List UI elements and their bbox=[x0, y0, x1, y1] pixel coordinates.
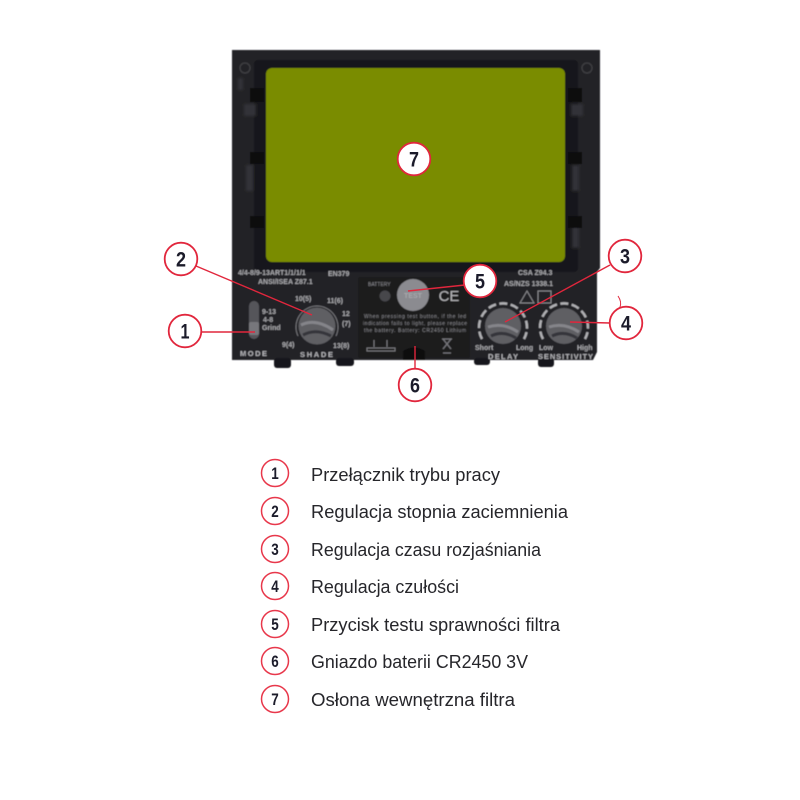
disposal symbol bbox=[442, 339, 452, 353]
callout 1: 1 bbox=[180, 320, 190, 344]
mode switch: 9-13 bbox=[262, 309, 276, 316]
right standards text bbox=[504, 270, 553, 288]
shade knob: 10(5) bbox=[295, 296, 311, 303]
CE mark: CE bbox=[439, 288, 459, 305]
mode switch: MODE bbox=[240, 349, 267, 358]
side rails bbox=[238, 78, 583, 248]
callout 3 bbox=[609, 240, 641, 272]
shade knob: SHADE bbox=[300, 350, 333, 359]
polarity symbol bbox=[367, 340, 395, 351]
callout 4: 4 bbox=[621, 312, 631, 336]
legend item 5: 5 bbox=[271, 615, 279, 634]
green filter window bbox=[266, 68, 565, 262]
left standards text: 4/4-8/9-13ART1/1/1/1 bbox=[238, 270, 306, 277]
legend item 3: Regulacja czasu rozjaśniania bbox=[311, 540, 542, 560]
legend bbox=[262, 460, 569, 712]
panel instruction text bbox=[363, 314, 467, 334]
legend item 7 bbox=[262, 686, 516, 712]
battery socket bbox=[403, 348, 425, 360]
legend item 7: Osłona wewnętrzna filtra bbox=[311, 690, 516, 710]
callout 2 bbox=[165, 243, 197, 275]
legend item 5 bbox=[262, 610, 561, 638]
battery test panel: TEST bbox=[404, 293, 423, 300]
legend item 6: Gniazdo baterii CR2450 3V bbox=[311, 652, 528, 672]
delay knob: DELAY bbox=[488, 352, 518, 361]
callout 6: 6 bbox=[410, 374, 420, 398]
battery test panel bbox=[358, 277, 470, 360]
legend item 4: Regulacja czułości bbox=[311, 577, 459, 597]
callout 2: 2 bbox=[176, 248, 186, 272]
callout 5 bbox=[464, 265, 496, 297]
warning icons bbox=[520, 291, 551, 303]
callout 7 bbox=[398, 143, 430, 175]
legend item 3 bbox=[262, 536, 542, 562]
screws bbox=[240, 63, 250, 73]
right standards text: CSA Z94.3 bbox=[518, 270, 552, 277]
callout 1 bbox=[169, 315, 201, 347]
inner frame bbox=[254, 60, 578, 272]
mode switch: 4-8 bbox=[263, 317, 273, 324]
test button bbox=[397, 279, 429, 311]
legend item 4 bbox=[262, 572, 459, 600]
right standards text: AS/NZS 1338.1 bbox=[504, 281, 553, 288]
shade knob: 11(6) bbox=[327, 298, 343, 305]
left standards text: ANSI/ISEA Z87.1 bbox=[258, 279, 313, 286]
callout 5: 5 bbox=[475, 270, 485, 294]
delay knob: Long bbox=[516, 345, 533, 352]
battery test panel: BATTERY bbox=[368, 282, 391, 288]
sensitivity knob: High bbox=[577, 345, 593, 352]
left standards text: EN379 bbox=[328, 271, 350, 278]
sensitivity knob bbox=[538, 303, 593, 361]
device body bbox=[232, 50, 600, 360]
shade knob: (7) bbox=[342, 321, 351, 328]
panel instruction text: the battery. Battery: CR2450 Lithium bbox=[364, 328, 466, 334]
panel instruction text: When pressing test button, if the led bbox=[364, 314, 466, 320]
legend item 6 bbox=[262, 648, 528, 674]
shade knob bbox=[282, 296, 351, 359]
legend item 2: 2 bbox=[271, 502, 279, 521]
shade knob: 12 bbox=[342, 311, 350, 318]
callout 6 bbox=[399, 369, 431, 401]
legend item 5: Przycisk testu sprawności filtra bbox=[311, 615, 561, 635]
mode switch: Grind bbox=[262, 325, 281, 332]
legend item 1 bbox=[262, 460, 500, 486]
panel instruction text: indication fails to light, please replace bbox=[363, 321, 467, 327]
left standards text bbox=[238, 270, 350, 286]
legend item 3: 3 bbox=[271, 540, 279, 559]
shade knob: 9(4) bbox=[282, 342, 294, 349]
shade knob: 13(8) bbox=[333, 343, 349, 350]
callout 3: 3 bbox=[620, 246, 630, 268]
delay knob: Short bbox=[475, 345, 494, 352]
delay knob bbox=[475, 303, 533, 361]
callout 7: 7 bbox=[409, 148, 419, 172]
legend item 4: 4 bbox=[271, 577, 279, 596]
sensitivity knob: SENSITIVITY bbox=[538, 352, 593, 361]
legend item 2 bbox=[262, 498, 569, 524]
legend item 6: 6 bbox=[271, 652, 279, 671]
callout lines bbox=[196, 265, 621, 370]
legend item 2: Regulacja stopnia zaciemnienia bbox=[311, 502, 569, 522]
sensitivity knob: Low bbox=[539, 345, 554, 352]
legend item 7: 7 bbox=[271, 690, 279, 709]
legend item 1: 1 bbox=[271, 464, 279, 483]
callout 4 bbox=[610, 307, 642, 339]
bottom feet bbox=[274, 358, 554, 368]
mode switch bbox=[240, 301, 281, 358]
legend item 1: Przełącznik trybu pracy bbox=[311, 465, 500, 485]
filter device bbox=[232, 50, 600, 368]
